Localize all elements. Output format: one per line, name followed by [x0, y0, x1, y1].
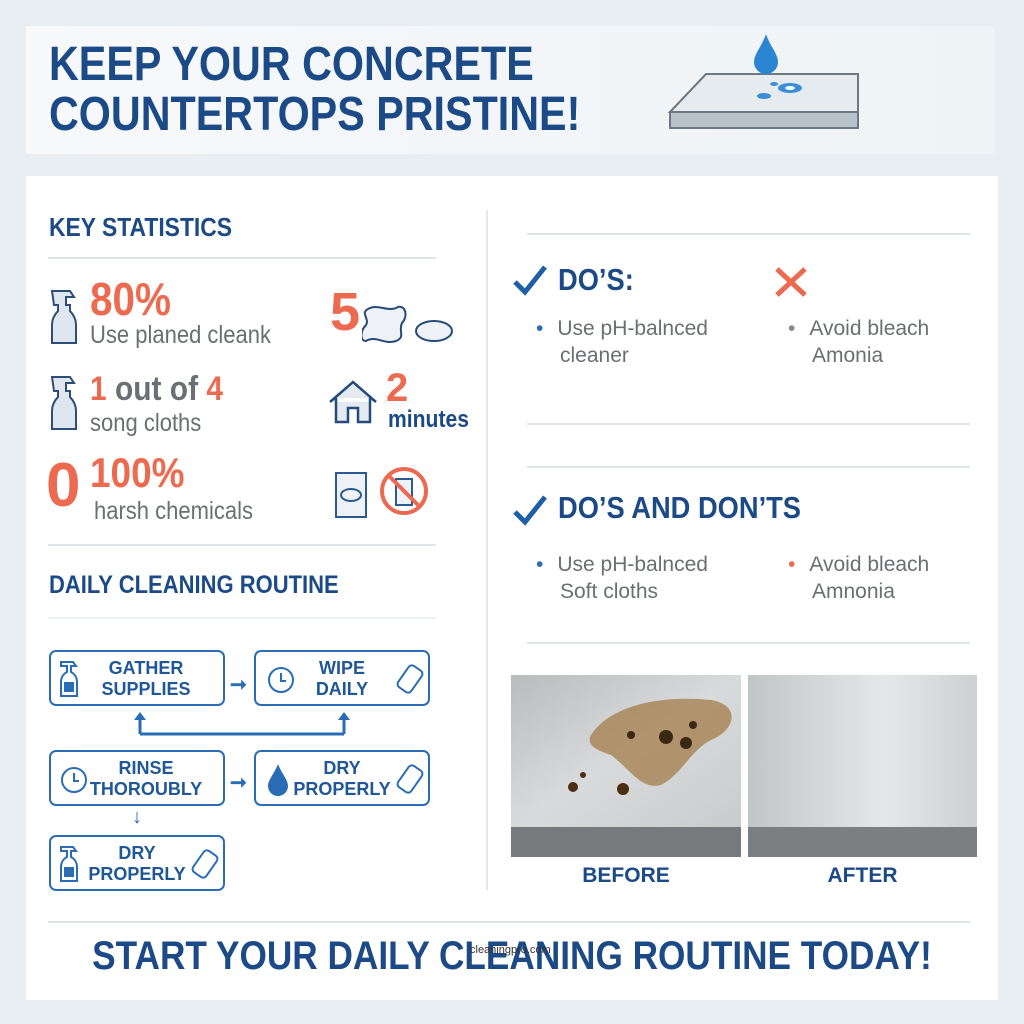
box: wipe daily — [254, 650, 430, 706]
section: do's and don'ts: • Avoid bleach — [788, 553, 929, 576]
icon: spray bottle 2 — [50, 376, 77, 430]
stat 1 out of 4: song cloths — [90, 409, 201, 437]
stat 2 minutes with house icon — [329, 366, 469, 433]
section: do's and don'ts: • Use pH-balnced — [536, 553, 708, 576]
icon: box and no bottle — [335, 467, 428, 518]
title: COUNTERTOPS PRISTINE! — [49, 88, 580, 141]
icon: x — [775, 267, 807, 297]
icon: check — [513, 266, 547, 296]
box: rinse thoroubly: RINSE — [118, 758, 174, 778]
stat 80% — [90, 273, 271, 349]
section: do's and don'ts: DO’S AND DON’TS — [558, 490, 801, 525]
stat 80%: 80% — [90, 273, 171, 325]
right column — [527, 233, 970, 235]
stat 5 cloths — [330, 282, 453, 343]
box: dry properly 2: PROPERLY — [88, 864, 186, 884]
box: dry properly — [254, 750, 430, 806]
title: KEEP YOUR CONCRETE — [49, 38, 534, 91]
heading: key statistics: KEY STATISTICS — [49, 212, 232, 242]
box: rinse thoroubly — [49, 750, 225, 806]
box: gather supplies: GATHER — [109, 658, 183, 678]
stat 80%: Use planed cleank — [90, 321, 271, 349]
section: do's: DO’S: — [558, 262, 634, 297]
title — [49, 38, 580, 141]
label: after: AFTER — [828, 864, 898, 887]
box: rinse thoroubly: THOROUBLY — [90, 779, 202, 799]
box: dry properly 2: DRY — [118, 843, 156, 863]
box: gather supplies — [49, 650, 225, 706]
stat 5 cloths: 5 — [330, 282, 360, 342]
box: gather supplies: SUPPLIES — [101, 679, 191, 699]
section: do's: cleaner — [560, 344, 629, 367]
box: dry properly: DRY — [323, 758, 361, 778]
stat 0 100%: 0 — [46, 451, 80, 520]
stats block — [46, 273, 469, 525]
box: dry properly: PROPERLY — [293, 779, 391, 799]
heading: daily cleaning routine: DAILY CLEANING ROUTINE — [49, 571, 339, 599]
section: do's and don'ts: Amnonia — [812, 580, 895, 603]
stat 0 100% — [46, 449, 253, 525]
stat 0 100%: 100% — [90, 449, 185, 496]
main panel — [26, 176, 998, 1000]
arrow: loop back — [134, 712, 350, 736]
box: wipe daily: DAILY — [316, 679, 368, 699]
photo: after — [748, 675, 977, 857]
icon: countertop with water drop — [668, 34, 859, 129]
box: dry properly 2 — [49, 835, 225, 891]
flowchart — [49, 650, 430, 891]
section: do's: • Use pH-balnced — [536, 317, 708, 340]
icon: spray bottle — [50, 290, 77, 344]
section: do's — [513, 262, 929, 367]
stat 1 out of 4 — [90, 370, 223, 437]
section: do's and don'ts: Soft cloths — [560, 580, 658, 603]
header panel — [26, 26, 994, 154]
stat 2 minutes with house icon: minutes — [388, 406, 469, 433]
arrow: ➞ — [230, 674, 247, 696]
section: do's and don'ts — [513, 490, 929, 603]
section: do's: Amonia — [812, 344, 883, 367]
watermark: cleaningpro.com — [470, 944, 551, 956]
label: before: BEFORE — [582, 864, 670, 887]
arrow down: ↓ — [132, 806, 142, 828]
section: do's: • Avoid bleach — [788, 317, 929, 340]
stat 1 out of 4: 1 out of 4 — [90, 370, 223, 408]
arrow: ➞ — [230, 772, 247, 794]
box: wipe daily: WIPE — [319, 658, 365, 678]
stat 2 minutes with house icon: 2 — [386, 366, 408, 410]
call to action: START YOUR DAILY CLEANING ROUTINE TODAY! — [92, 934, 932, 978]
stat 0 100%: harsh chemicals — [94, 497, 253, 525]
photo: before — [511, 675, 741, 857]
